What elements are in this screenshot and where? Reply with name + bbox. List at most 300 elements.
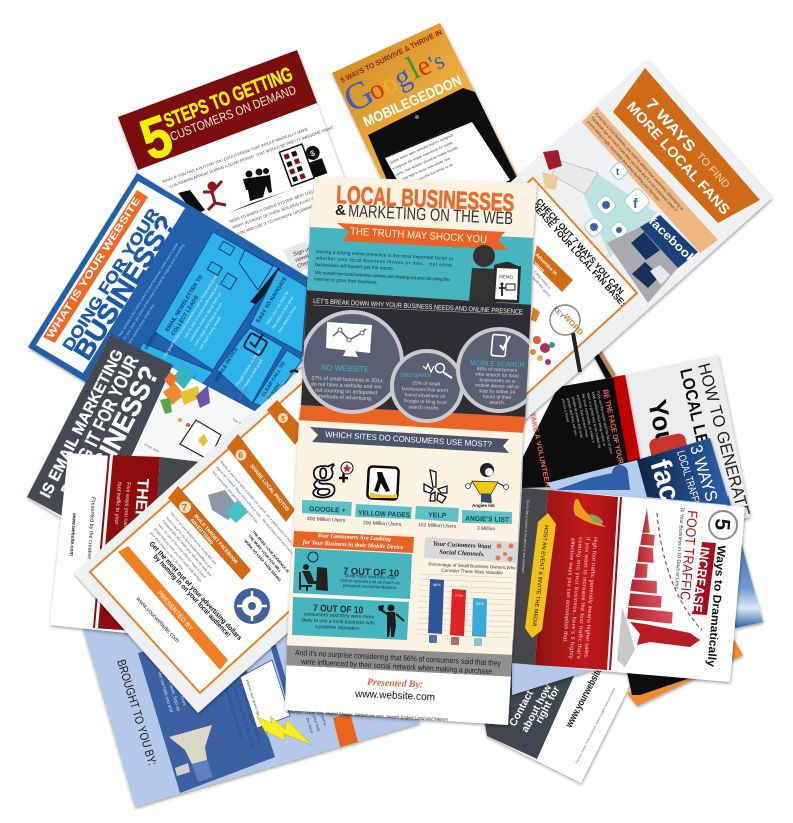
text: zero search: ZERO SEARCH	[400, 373, 431, 379]
heading: consumers looking	[293, 531, 414, 553]
text: lower blue copy: Free	[374, 709, 381, 719]
icon: megaphone and hand	[542, 150, 598, 194]
text: phone copy: update which rates websites that it's designed	[389, 133, 453, 165]
icon: red rocket	[630, 622, 700, 647]
text: step seven copy: You can set your budget as low as you like and	[169, 511, 217, 566]
panel: email newsletter: COLLECT LEADS	[171, 294, 200, 337]
panel: social channels heading: Social Channels.	[439, 549, 485, 558]
sheet: five ways to increase foot traffic	[512, 488, 745, 695]
text: social glyphs: f	[633, 195, 638, 211]
icon: office building with dollar	[279, 139, 327, 186]
text: intro copy on red	[561, 537, 598, 659]
step tag: five: 5	[281, 416, 285, 423]
icon: angie mascot: Angies list	[472, 503, 495, 508]
panel: framed content	[90, 178, 637, 693]
text: your website: www.yourwebsite	[564, 666, 605, 730]
text: volunteer copy: If you are the owner and the face of your	[596, 390, 614, 455]
text: teal intro copy: Having a strong online presence is the most important factor to	[316, 249, 453, 261]
band: which sites	[310, 427, 509, 453]
panel: header	[613, 68, 760, 223]
text: phone copy: guide shows you the five things to do	[401, 163, 453, 189]
text: blue sheet copy: about local search	[178, 665, 194, 702]
text: email copy	[144, 386, 252, 454]
icon: yelp burst	[424, 470, 447, 503]
text: business: BUSINESS?	[68, 361, 165, 512]
text: local traffic: LOCAL TRAFFIC	[674, 449, 703, 510]
text: no website copy: do not have a website and are	[310, 381, 382, 391]
callout: sign up: Chimp	[297, 259, 314, 270]
callout: sign up	[283, 241, 320, 275]
text: bold tip	[243, 530, 290, 583]
sheet: five ways part two	[50, 453, 260, 645]
chart: dashed curve	[657, 513, 702, 630]
sheet: five steps to getting customers	[118, 50, 400, 397]
text: get the most out: Get the most out of your advertising dollars	[148, 541, 243, 642]
text: zero search copy	[402, 380, 449, 412]
step tag: seven targeted ads: BUILD TARGET FACEBOOK	[192, 513, 239, 566]
text: customers on demand: CUSTOMERS ON DEMAND	[168, 83, 298, 144]
text: there: THERE	[130, 478, 151, 533]
icon: businessman with memo	[469, 245, 521, 303]
icon: monitor with chart	[326, 322, 372, 357]
text: contact us about how	[507, 682, 563, 734]
panel: header: TO FIND	[694, 151, 731, 191]
text: bold tip: THE MORE YOUR AUDIENCE IS	[251, 530, 290, 574]
heading: lets break down: LET'S BREAK DOWN WHY YOUR BUSINESS NEEDS AND ONLINE PRESENCE	[313, 298, 523, 316]
text: tagline: To Your Business in 10 Days or Less	[673, 507, 685, 590]
label: angies list	[462, 510, 512, 524]
text: step six copy: the local paper and your own local friends	[261, 518, 304, 567]
icon: monitor outline	[180, 420, 221, 460]
sheet: what is your website doing	[28, 173, 340, 471]
text: body intro lines: Your website is the online home of your business, make sure it works	[117, 242, 179, 338]
band: grey closing	[280, 645, 516, 677]
icon: yellow pages	[367, 466, 399, 500]
text: presented by: Presented By:	[367, 677, 423, 690]
icon: search wave	[423, 364, 452, 378]
text: volunteer copy: town is a great way to be trusted by	[586, 392, 602, 449]
text: five ways copy: Five ways you can	[122, 482, 131, 527]
text: volunteer copy: groups and they will see	[566, 397, 578, 436]
text: is email marketing: IS EMAIL MARKETING	[37, 347, 127, 501]
circle: zero search	[392, 351, 462, 421]
callout: host an event	[525, 513, 556, 638]
circle: mobile search	[458, 329, 540, 411]
text: blue sheet copy: Presented by youruser with the	[239, 683, 262, 744]
text: mobile search copy	[475, 366, 520, 406]
icon: colourful crowd	[530, 336, 555, 365]
icon: envelopes and laptop	[207, 241, 273, 290]
text: google logo: G	[337, 71, 381, 121]
text: mobile search copy: who search for local	[475, 372, 519, 379]
panel: seven of ten trust reviews	[293, 548, 412, 599]
chart: social bars: 63%	[476, 602, 484, 606]
icon: coloured envelopes	[160, 365, 210, 427]
text: what is your website: WHAT IS YOUR WEBSITE	[45, 195, 143, 341]
icon: red jumping figure	[203, 181, 226, 210]
chart: social bars: 86%	[433, 583, 441, 587]
text: closing statement: And it's no surprise considering that 66% of consumers said that they	[295, 648, 501, 668]
panel: email newsletter: way to stay in contact with leads and	[183, 284, 220, 339]
text: blue sheet copy: We can help you and	[157, 671, 174, 713]
panel: easy to navigate: EASY TO NAVIGATE	[256, 276, 289, 324]
callout: sign up: Sign up	[293, 246, 312, 258]
label: increase: INCREASE	[689, 546, 713, 613]
step tag: seven targeted ads	[168, 486, 251, 580]
text: step six copy: way to get noticed. Share them with your fans	[215, 465, 262, 518]
step tag: six share local photos: SHARE LOCAL PHOTOS	[248, 463, 290, 513]
text: fine print: Sources: social media examiner, search engine land and others	[574, 687, 616, 764]
step tag: six share local photos: 6	[238, 451, 244, 460]
circle: no website	[302, 312, 402, 412]
text: second copy: NEED TO BREAK A SIMPLE SYSTEM, BEST LOCAL	[229, 187, 319, 224]
panel: mobile device	[214, 328, 283, 403]
text: phone copy: users. Your website should be mobile friendly	[395, 146, 459, 177]
icon: check box	[243, 333, 268, 356]
text: google logo: g	[388, 59, 417, 95]
text: number five: 5	[132, 103, 181, 173]
text: steps to getting: STEPS TO GETTING	[161, 63, 296, 133]
text: reputation copy: a positive reputation.	[315, 624, 361, 632]
icon: social buttons	[583, 161, 651, 240]
text: user counts: 200 Million Users	[363, 520, 402, 528]
text: lower blue copy: If you've	[319, 711, 328, 727]
text: reputation copy: likely to use a local business with	[301, 617, 375, 627]
text: teal intro copy: businesses still haven't got the memo.	[315, 262, 394, 271]
icon: megaphone	[169, 725, 213, 782]
text: volunteer copy	[561, 390, 614, 455]
text: how to generate: HOW TO GENERATE	[694, 361, 753, 519]
text: youtube logo: You	[642, 397, 681, 449]
text: user counts	[307, 516, 496, 532]
text: user counts: 400 Million Users	[307, 516, 346, 524]
panel: teal intro	[305, 227, 536, 305]
text: second copy: RIGHT IN FRONT OF THEM. BUILDING A LIST OF	[232, 194, 318, 230]
icon: social rays	[583, 167, 657, 257]
text: bold tip: THE MORE YOUR ADS WILL	[247, 534, 283, 574]
panel: tan intro: If you run a local business, you need to attract local customers. Advertising in	[594, 112, 684, 211]
icon: yellow lightning	[257, 716, 312, 745]
panel: tan intro	[582, 107, 718, 253]
text: google logo: e	[411, 50, 436, 83]
panel: tan intro: you're doing it right: remember this when building your fan base	[586, 120, 661, 202]
chart: red stairs	[627, 507, 673, 624]
text: three ways: 3 WAYS	[686, 443, 721, 504]
text: second copy: YOU AND USE IT TO PROMOTE UPCOMING	[237, 204, 314, 236]
label: google plus	[302, 500, 352, 516]
text: intro copy: WHAT IF YOU HAD A BUTTON YOU COULD PRESS THAT WOULD MAGICALLY MAKE	[162, 126, 309, 184]
text: step six copy: and community and get much more reach from	[211, 470, 259, 524]
text: intro copy: CUSTOMERS APPEAR DURING A SLOW PERIOD. THAT WOULD BE PRETTY AWESOME RIGHT	[169, 125, 334, 189]
text: youtube logo	[642, 397, 690, 469]
text: chart title: Consider These Sites Valuable	[441, 568, 503, 575]
icon: rocket arc	[574, 499, 606, 527]
icon: facebook store	[607, 214, 699, 303]
step tag: seven targeted ads: ADVERTISING	[188, 517, 215, 546]
text: step seven copy: Facebook lets you target your ads by zip code and	[161, 519, 213, 577]
panel: seo	[125, 331, 213, 420]
text: zero search copy: 25% of small	[412, 380, 440, 388]
text: mobile search copy: search.	[489, 400, 505, 406]
text: blue sheet copy: big win, it can look on the 25 911	[232, 685, 256, 749]
panel: email newsletter: every page and keep in touch	[193, 302, 223, 347]
text: mobile search: MOBILE SEARCH	[470, 358, 524, 369]
text: lower blue copy	[305, 709, 381, 734]
text: reviews copy	[340, 573, 401, 590]
panel: email newsletter: customers, keep a signup form on	[188, 292, 222, 343]
text: step seven copy: town. It's one of the most effective ways to reach	[157, 523, 207, 579]
text: five ways copy: foot traffic to your	[113, 482, 122, 525]
icon: circled five	[709, 511, 737, 539]
icon: angie mascot	[466, 463, 508, 508]
text: brought to you by: BROUGHT TO YOU BY:	[114, 658, 160, 767]
icon: inner white card: Internet local search tips	[245, 679, 261, 717]
text: facebook word: fac	[643, 456, 686, 505]
text: bold tip: WORK SO KEEP THEM SEEING	[243, 539, 282, 583]
text: step six copy	[211, 460, 304, 567]
panel: email newsletter: EMAIL NEWSLETTER TO	[165, 274, 205, 333]
text: email copy: Tips for email	[232, 417, 252, 431]
text: email copy: Email list	[237, 386, 247, 400]
text: google logo: o	[363, 73, 390, 107]
step tag: six share local photos	[227, 434, 295, 522]
main infographic: local businesses and marketing on the web	[284, 176, 540, 728]
text: zero search copy: found anywhere on	[405, 392, 446, 400]
icon: black figure	[178, 190, 205, 215]
text: closing statement	[295, 648, 501, 676]
text: intro copy on red: coming into your business, here's 5 highly	[567, 537, 583, 659]
text: volunteer copy: local business then being visible in	[591, 391, 606, 446]
text: five ways copy	[113, 482, 131, 527]
text: blue sheet copy: make it work. Sign up	[164, 669, 182, 712]
panel: email newsletter: with them every month	[198, 316, 222, 351]
panel: mobile device: People browse on the go	[235, 349, 261, 387]
title: ampersand: &	[335, 202, 346, 219]
text: step seven copy	[149, 511, 217, 583]
icon: person with megaphone	[378, 604, 404, 637]
band: presented by: PRESENTED BY	[155, 590, 194, 633]
text: intro copy on red: effective ways you can accomplish that.	[561, 538, 575, 643]
title: marketing on the web: MARKETING ON THE WEB	[348, 201, 514, 228]
text: volunteer copy: people at events and local	[571, 396, 584, 438]
text: phone copy	[386, 126, 459, 189]
text: get the most out: by homing in on your local audience!	[152, 554, 232, 639]
icon: businessman with memo: MEMO	[499, 274, 514, 280]
text: zero search copy: search results.	[408, 404, 440, 412]
sheet: contact	[470, 640, 635, 783]
text: mobile search copy: stop by within 24	[479, 388, 516, 396]
panel: seo: DESIGN	[144, 331, 159, 351]
panel: header: MORE LOCAL FANS	[624, 98, 733, 218]
step tag: five	[267, 400, 305, 445]
label: yellow pages: YELLOW PAGES	[358, 510, 410, 519]
panel: mobile device: it needs to look great	[241, 358, 264, 391]
text: google logo: l	[401, 50, 426, 87]
label: yelp: YELP	[428, 512, 447, 520]
text: email copy: email stats	[144, 442, 160, 454]
step tag: advertise	[529, 245, 573, 292]
text: dark strip copy: Every day a reason to be above to see and learn	[521, 500, 530, 573]
icon: keyword magnifier	[531, 305, 585, 372]
text: body intro lines: new visitors every single day.	[127, 303, 155, 345]
icon: phone check	[491, 334, 510, 357]
panel: seo: Use good design	[162, 332, 181, 359]
heading: consumers looking: for Your Business in their Mobile Device	[303, 540, 404, 551]
panel: call to action	[253, 350, 302, 408]
text: step six copy: are a good source of new faces	[265, 513, 299, 551]
text: teal intro copy: whether your local business thrives or dies... but some	[316, 256, 452, 268]
icon: compass target	[234, 588, 270, 624]
icon: circled five: 5	[710, 518, 734, 532]
text: blue sheet copy	[157, 665, 262, 749]
text: mobile search copy: hours of their	[483, 394, 512, 401]
text: google logo: 's	[425, 48, 449, 77]
icon: network dots	[496, 544, 514, 562]
panel: social channels heading	[424, 537, 518, 563]
panel: tan intro: Facebook can do much more than you think and it is not expensive either if	[590, 116, 678, 213]
text: no website copy: 27% of small business in 2014	[311, 375, 383, 385]
text: step seven copy: people that are near you and could walk through	[153, 527, 203, 583]
panel: seven of ten reputation	[292, 597, 409, 640]
icon: google plus	[312, 447, 353, 498]
label: angies list: ANGIE'S LIST	[465, 516, 510, 524]
band: which sites: WHICH SITES DO CONSUMERS USE MOST?	[325, 430, 493, 449]
text: intro copy on red: If you want to increase the foot traffic that's	[575, 537, 590, 659]
text: no website copy	[310, 375, 383, 402]
text: user counts: 3 Million	[477, 526, 496, 532]
text: teal intro copy	[314, 249, 453, 285]
text: presented by creative: Presented by the creative	[86, 497, 96, 560]
icon: phone	[368, 88, 518, 235]
text: zero search copy: businesses that aren't	[402, 386, 449, 394]
panel: easy to navigate: they need to know	[277, 305, 297, 334]
text: phone copy: to rank high in these new results. Our	[398, 156, 452, 183]
text: social glyphs: t	[616, 167, 620, 178]
icon: google plus: g	[312, 447, 335, 498]
text: intro copy on red: High foot traffic generally means higher sales.	[582, 537, 598, 659]
text: business: BUSINESS?	[68, 210, 182, 365]
label: yelp	[415, 506, 459, 522]
sheet: mobilegeddon	[332, 23, 522, 240]
sheet: how to generate local leads	[625, 355, 753, 540]
text: seven of ten: 7 OUT OF 10	[343, 566, 399, 579]
text: no website copy: methods of advertising.	[318, 394, 373, 402]
text: no website copy: not counting on antiquated	[315, 388, 377, 396]
icon: group of people	[208, 490, 248, 523]
icon: business people	[228, 168, 290, 213]
text: reviews copy: personal recommendations.	[343, 583, 397, 590]
label: google plus: GOOGLE +	[309, 506, 346, 515]
title: local businesses: LOCAL BUSINESSES	[336, 181, 515, 217]
text: contact us about how: Contact	[507, 688, 536, 728]
text: contact us about how: about how	[519, 682, 555, 734]
text: closing statement: were influenced by their social network when making a purchase.	[300, 657, 494, 676]
text: check out seven ways: INCREASE YOUR LOCAL FAN BASE:	[520, 190, 628, 308]
icon: blue silhouette	[556, 465, 630, 490]
heading: consumers looking: Your Consumers Are Looking	[317, 533, 391, 543]
panel: call to action: ACTION	[267, 382, 282, 402]
band: presented by	[118, 546, 228, 670]
text: chart title: Percentage of Small Business Owners Who	[428, 562, 516, 570]
icon: inner white card	[240, 645, 292, 728]
text: teal intro copy: We reveal how local business owners are missing out and not using the	[315, 270, 450, 282]
text: phone copy: to improve the mobile experience for mobile	[392, 140, 454, 171]
panel: social channels heading: Your Customers Want	[433, 540, 492, 551]
label: yellow pages	[355, 504, 412, 519]
text: reputation copy	[301, 611, 375, 632]
text: lower blue copy: the client	[305, 717, 315, 734]
panel: mobile device: MOBILE DEVICE	[214, 346, 240, 383]
banner: the truth may shock you	[337, 223, 508, 250]
sheet: brought to you by	[83, 560, 420, 807]
icon: person at desk	[299, 552, 328, 591]
text: step seven copy: your door today, so use it for sure	[149, 531, 184, 571]
text: mobile search copy: mobile device call or	[475, 383, 520, 390]
step tag: advertise: Groups	[529, 257, 546, 274]
panel: easy to navigate: Make your site easy for	[265, 290, 290, 326]
icon: office building with dollar: $	[309, 148, 317, 159]
panel: call to action: CLEAR CALL TO	[261, 361, 287, 398]
text: teal intro copy: internet to grow their business.	[314, 277, 378, 285]
panel: white footer	[285, 665, 511, 725]
sheet: three ways facebook	[547, 438, 763, 628]
text: no website: NO WEBSITE	[321, 363, 370, 374]
text: body intro lines: for you. Here are some of the ways it should be helping and converting	[122, 243, 185, 341]
banner: the truth may shock you: THE TRUTH MAY SHOCK YOU	[350, 226, 487, 246]
text: blue sheet copy: today and see more	[171, 667, 188, 707]
text: volunteer copy: you as a friend.	[561, 398, 570, 423]
text: be the face of: BE THE FACE OF YOUR	[601, 389, 626, 465]
callout: host an event: HOST AN EVENT & INVITE THE MEDIA	[531, 525, 549, 627]
text: user counts: 102 Million Users	[418, 522, 457, 530]
text: mobile search copy: 86% of consumers	[477, 366, 518, 374]
text: contact us about how: right for	[533, 684, 563, 725]
panel: email newsletter	[155, 232, 281, 370]
text: step copy: Local media is	[533, 270, 552, 290]
text: google logo: o	[376, 67, 403, 101]
rods behind panel	[592, 350, 616, 379]
step tag: seven targeted ads: 7	[182, 502, 187, 512]
sheet: seven ways to find more local fans	[74, 60, 772, 713]
text: sources: Sources: Local Vox, Digital Sherpa, Slideshare.com, Search Engine Land and Nielsen	[287, 709, 448, 722]
panel: email newsletter: Email newsletters are a cheap and great	[178, 274, 218, 335]
panel: dark breakdown	[298, 290, 535, 420]
text: seven of ten: 7 OUT OF 10	[313, 603, 363, 616]
text: volunteer copy: a priority. Get out and meet	[576, 394, 589, 438]
band: orange divider	[296, 405, 528, 433]
text: website: www.website.com	[68, 512, 77, 557]
icon: smoke	[617, 607, 635, 667]
text: step six copy: Photos of your local area or people are a good	[219, 460, 267, 514]
text: reviews copy: Quite Hubs said they trust	[345, 573, 396, 580]
text: your website: www.yourwebsite.com	[134, 596, 180, 644]
chart: social bars: 77%	[455, 594, 463, 598]
text: reputation copy: consumers said they were more	[304, 611, 375, 621]
text: lower blue copy: your help	[312, 715, 322, 733]
sheet: black volunteer panel	[522, 350, 640, 488]
text: local leads: LOCAL LEADS	[676, 367, 719, 478]
text: doing for your: DOING FOR YOUR	[60, 205, 163, 354]
text: google logo	[337, 48, 449, 121]
text: mobilegeddon: MOBILEGEDDON	[361, 73, 464, 131]
sheet: orange and black back	[627, 638, 743, 706]
text: volunteer copy: the local community, so make it	[581, 393, 595, 443]
panel: easy to navigate	[250, 270, 307, 353]
text: doing it for your: DOING IT FOR YOUR	[58, 352, 144, 499]
text: phone copy: As you may already know - Google released an	[386, 126, 453, 159]
text: five ways survive: 5 WAYS TO SURVIVE & THRIVE IN	[339, 28, 444, 85]
panel: header: 7 WAYS	[642, 95, 699, 156]
